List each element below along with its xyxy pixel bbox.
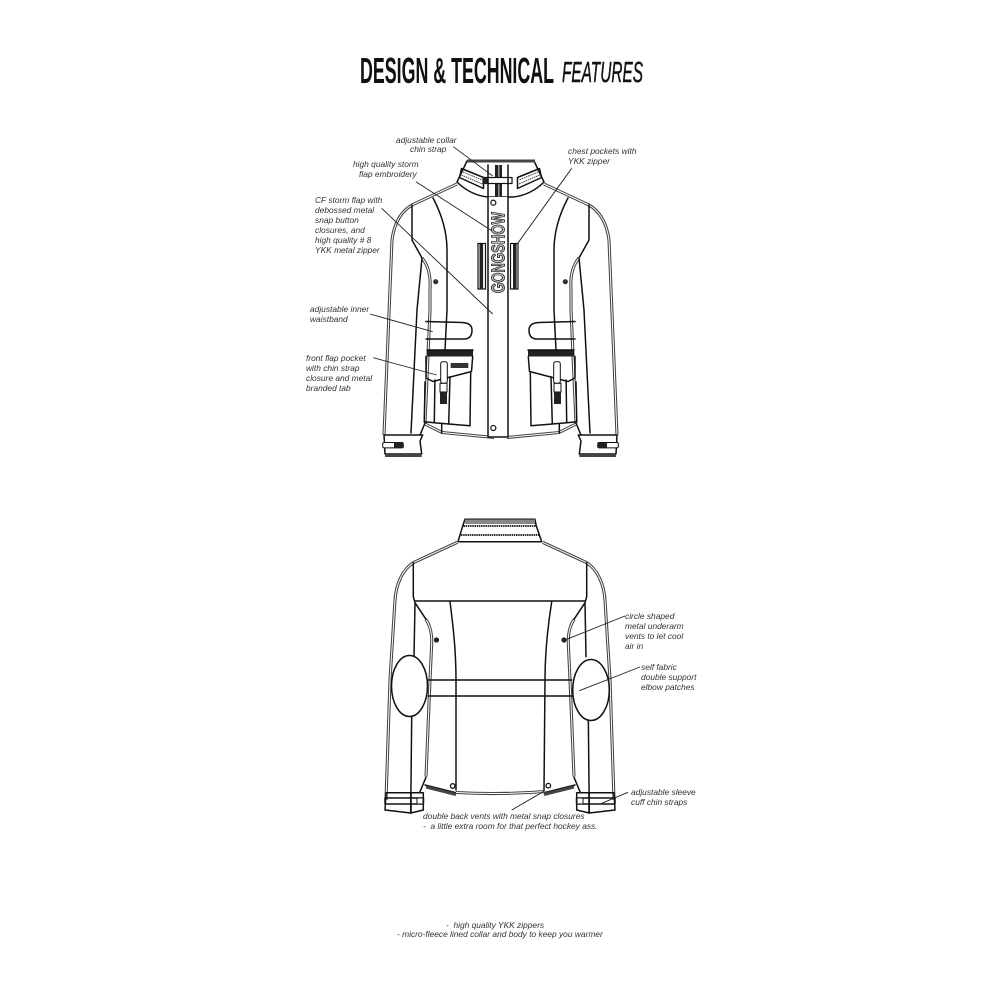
- label: adjustable inner waistband: waistband: [310, 314, 348, 324]
- label: CF storm flap: closures, and: [315, 225, 365, 235]
- title: DESIGN & TECHNICAL: [360, 50, 554, 91]
- label: CF storm flap: snap button: [315, 215, 359, 225]
- front jacket drawing: [383, 161, 618, 456]
- label: CF storm flap: high quality # 8: [315, 235, 372, 245]
- storm flap logo: GONGSHOW: [488, 212, 508, 293]
- label: sleeve cuff straps: cuff chin straps: [631, 797, 688, 807]
- back jacket right half: [543, 542, 615, 813]
- label: underarm vents: metal underarm: [625, 621, 684, 631]
- label: front flap pocket: closure and metal: [306, 373, 373, 383]
- label: adjustable collar chin strap: adjustable collar: [396, 135, 458, 145]
- collar centre and strap: [467, 161, 535, 437]
- label: chest pockets: chest pockets with: [568, 146, 637, 156]
- label: adjustable collar chin strap: chin strap: [410, 144, 447, 154]
- yoke and back panels: [415, 601, 585, 794]
- placket background: [488, 197, 508, 437]
- label: elbow patches: self fabric: [641, 662, 678, 672]
- label: back vents: - a little extra room for that perfect hockey ass.: [423, 821, 598, 831]
- label: front flap pocket: branded tab: [306, 383, 351, 393]
- elbow patch left: [392, 656, 428, 716]
- back collar: [458, 519, 542, 542]
- label: underarm vents: circle shaped: [625, 611, 675, 621]
- back jacket drawing: [385, 519, 615, 813]
- back jacket left half: [385, 542, 457, 813]
- label: elbow patches: elbow patches: [641, 682, 695, 692]
- leader lines: [370, 147, 640, 810]
- label: CF storm flap: YKK metal zipper: [315, 245, 381, 255]
- chest pocket zippers: [478, 244, 518, 289]
- label: adjustable inner waistband: adjustable inner: [310, 304, 370, 314]
- label: underarm vents: air in: [625, 641, 643, 651]
- label: front flap pocket: front flap pocket: [306, 353, 366, 363]
- label: CF storm flap: CF storm flap with: [315, 195, 383, 205]
- label: sleeve cuff straps: adjustable sleeve: [631, 787, 696, 797]
- label: front flap pocket: with chin strap: [306, 363, 360, 373]
- footer notes: - high quality YKK zippers: [446, 920, 545, 930]
- label: CF storm flap: debossed metal: [315, 205, 375, 215]
- label: chest pockets: YKK zipper: [568, 156, 611, 166]
- front jacket right half: [500, 161, 618, 456]
- title: FEATURES: [562, 57, 643, 89]
- label: back vents: double back vents with metal snap closures: [423, 811, 585, 821]
- front jacket left half: [383, 161, 501, 456]
- underarm vents and back snaps: [434, 637, 567, 788]
- label: underarm vents: vents to let cool: [625, 631, 684, 641]
- elbow patch right: [573, 660, 609, 720]
- label: storm flap embroidery: high quality storm: [353, 159, 419, 169]
- label: elbow patches: double support: [641, 672, 697, 682]
- label: storm flap embroidery: flap embroidery: [359, 169, 418, 179]
- pocket branded tab: [451, 363, 468, 368]
- footer notes: - micro-fleece lined collar and body to keep you warmer: [397, 929, 604, 939]
